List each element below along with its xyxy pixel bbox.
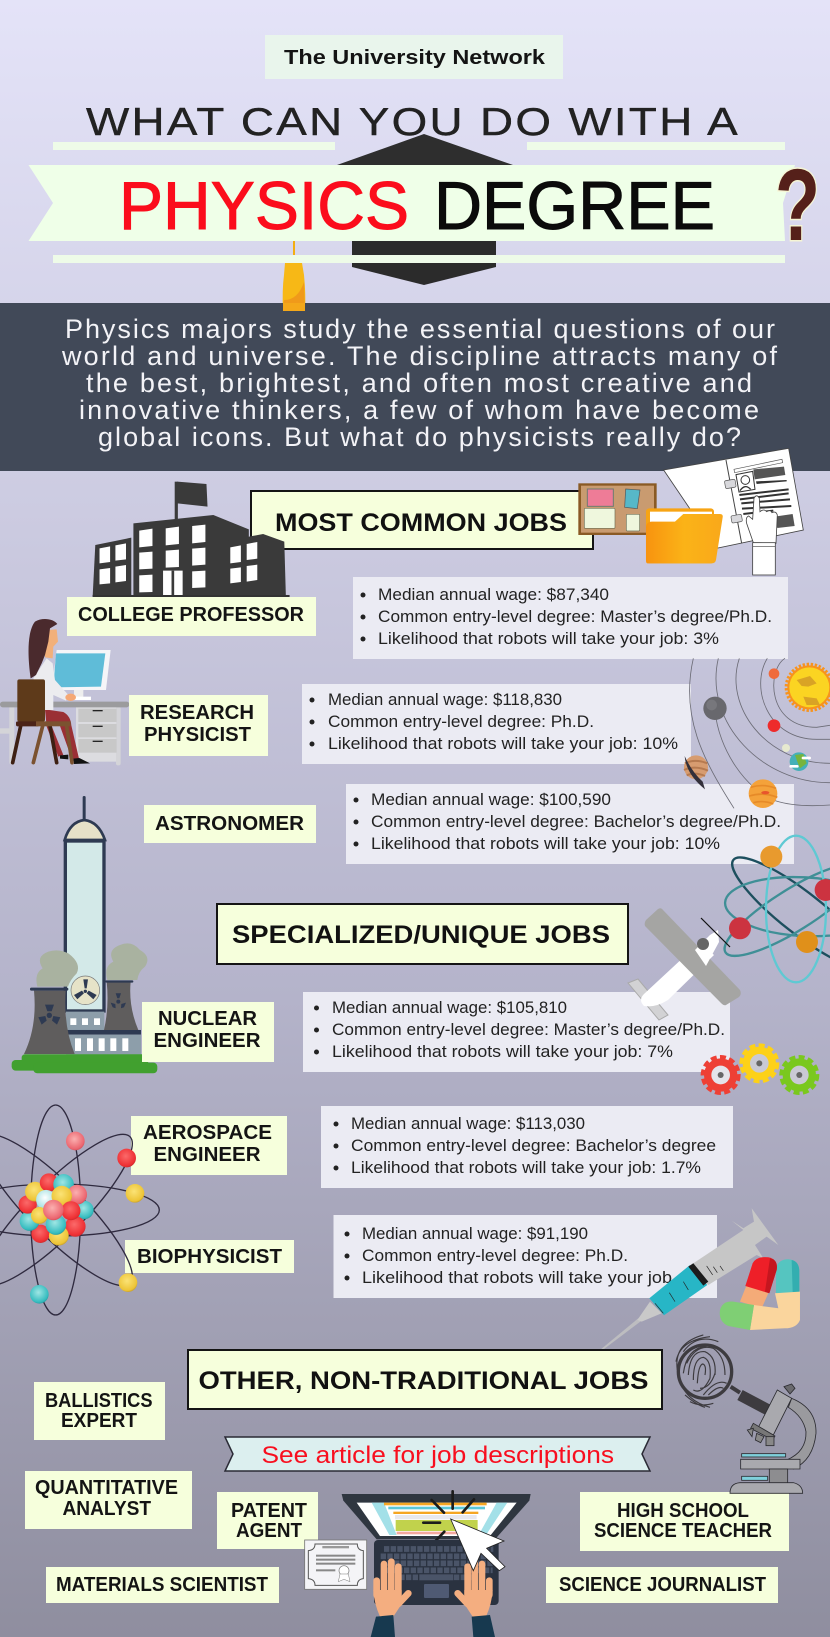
panel: research physicist facts: Likelihood that robots will take your job: 10%: [328, 734, 678, 753]
icon: fingerprint magnifier: [676, 1335, 768, 1410]
panel: nuclear engineer facts: Common entry-level degree: Master’s degree/Ph.D.: [332, 1020, 725, 1039]
title line one: WHAT CAN YOU DO WITH A: [86, 101, 740, 144]
panel: college professor facts: Common entry-level degree: Master’s degree/Ph.D.: [378, 607, 772, 626]
panel: biophysicist facts: Common entry-level degree: Ph.D.: [362, 1246, 628, 1265]
label: ballistics expert: BALLISTICS: [45, 1389, 152, 1412]
label: biophysicist: BIOPHYSICIST: [137, 1245, 282, 1268]
label: nuclear engineer: NUCLEAR: [158, 1007, 257, 1030]
pointing hand: [746, 496, 777, 575]
panel: astronomer facts: Likelihood that robots will take your job: 10%: [371, 834, 720, 853]
icon: laptop with hands: [342, 1491, 531, 1637]
icon: airplane: [628, 908, 741, 1020]
label: aerospace engineer: ENGINEER: [154, 1143, 261, 1166]
heading: specialized jobs: [217, 904, 628, 964]
icon: gears: [703, 1045, 817, 1093]
panel: astronomer facts: [346, 784, 794, 864]
ribbon: see article: [225, 1437, 650, 1471]
heading: other jobs: OTHER, NON-TRADITIONAL JOBS: [198, 1367, 648, 1395]
icon: certificate: [305, 1540, 367, 1589]
title ribbon: PHYSICS: [119, 168, 409, 244]
label: quantitative analyst: [25, 1471, 192, 1529]
panel: research physicist facts: [302, 684, 691, 764]
label: high school science teacher: [580, 1492, 789, 1551]
earth: [789, 752, 811, 771]
icon: solar system: [684, 658, 830, 808]
label: high school science teacher: SCIENCE TEACHER: [594, 1519, 772, 1542]
label: aerospace engineer: AEROSPACE: [143, 1121, 272, 1144]
label: research physicist: [129, 695, 268, 756]
folder: [646, 508, 723, 563]
document: [664, 448, 803, 548]
heading: specialized jobs: SPECIALIZED/UNIQUE JOBS: [232, 921, 610, 949]
sun: [787, 665, 830, 710]
laptop keyboard: [374, 1540, 499, 1605]
intro panel: [0, 303, 830, 471]
heading: other jobs: [188, 1350, 662, 1409]
heading: most common jobs: MOST COMMON JOBS: [275, 509, 567, 537]
label: astronomer: [144, 805, 316, 843]
icon: bulletin board, folder and document: [578, 448, 803, 575]
left cooling tower: [24, 950, 78, 1054]
label: quantitative analyst: QUANTITATIVE: [35, 1476, 178, 1499]
panel: research physicist facts: Median annual wage: $118,830: [328, 690, 562, 709]
hands: [371, 1562, 495, 1637]
panel: nuclear engineer facts: Likelihood that robots will take your job: 7%: [332, 1042, 673, 1061]
panel: research physicist facts: Common entry-level degree: Ph.D.: [328, 712, 594, 731]
panel: aerospace engineer facts: Common entry-level degree: Bachelor’s degree: [351, 1136, 716, 1155]
label: quantitative analyst: ANALYST: [62, 1497, 151, 1520]
right cooling tower: [104, 943, 147, 1030]
label: research physicist: RESEARCH: [140, 701, 254, 724]
label: science journalist: [546, 1567, 778, 1603]
panel: nuclear engineer facts: Median annual wage: $105,810: [332, 998, 567, 1017]
panel: college professor facts: [353, 577, 788, 659]
label: materials scientist: MATERIALS SCIENTIST: [56, 1573, 268, 1596]
intro panel: Physics majors study the essential questions of our: [65, 314, 775, 344]
heading: most common jobs: [251, 491, 593, 549]
intro panel: innovative thinkers, a few of whom have become: [79, 395, 759, 425]
label: astronomer: ASTRONOMER: [155, 812, 304, 835]
label: college professor: [67, 597, 316, 636]
title ribbon: [28, 142, 795, 263]
label: ballistics expert: EXPERT: [61, 1409, 137, 1432]
panel: nuclear engineer facts: [303, 992, 730, 1072]
nucleus: [18, 1173, 94, 1246]
label: science journalist: SCIENCE JOURNALIST: [559, 1573, 766, 1596]
cork board: [578, 483, 657, 535]
panel: aerospace engineer facts: [321, 1106, 733, 1188]
publisher badge: [265, 35, 563, 79]
panel: astronomer facts: Median annual wage: $100,590: [371, 790, 611, 809]
label: patent agent: AGENT: [236, 1519, 302, 1542]
label: research physicist: PHYSICIST: [144, 723, 251, 746]
intro panel: the best, brightest, and often most creative and: [86, 368, 752, 398]
icon: pills: [720, 1257, 800, 1330]
title ribbon: DEGREE: [434, 168, 715, 244]
panel: astronomer facts: Common entry-level degree: Bachelor’s degree/Ph.D.: [371, 812, 781, 831]
panel: biophysicist facts: Likelihood that robots will take your job: [362, 1268, 672, 1287]
icon: university building: [93, 482, 290, 599]
label: biophysicist: [125, 1240, 294, 1273]
icon: woman at computer: [0, 619, 129, 765]
intro panel: global icons. But what do physicists really do?: [98, 422, 741, 452]
cursor: [451, 1519, 505, 1571]
label: patent agent: [217, 1492, 318, 1549]
graduation cap graphic: [283, 134, 513, 311]
panel: aerospace engineer facts: Likelihood that robots will take your job: 1.7%: [351, 1158, 701, 1177]
icon: large atom: [0, 1105, 159, 1315]
ground: [12, 1054, 157, 1073]
jupiter: [749, 779, 777, 808]
ribbon: see article: See article for job descriptions: [262, 1442, 614, 1469]
panel: aerospace engineer facts: Median annual wage: $113,030: [351, 1114, 585, 1133]
label: patent agent: PATENT: [231, 1499, 307, 1522]
label: ballistics expert: [34, 1382, 165, 1440]
label: nuclear engineer: ENGINEER: [154, 1029, 261, 1052]
label: high school science teacher: HIGH SCHOOL: [617, 1499, 749, 1522]
label: nuclear engineer: [142, 1002, 274, 1062]
reactor symbol: [71, 976, 100, 1005]
publisher badge: The University Network: [284, 47, 546, 69]
label: college professor: COLLEGE PROFESSOR: [78, 603, 304, 626]
label: aerospace engineer: [131, 1116, 287, 1175]
icon: microscope: [730, 1384, 816, 1493]
label: materials scientist: [46, 1567, 279, 1603]
icon: nuclear power plant: [12, 796, 157, 1073]
laptop screen: [342, 1494, 531, 1539]
panel: biophysicist facts: Median annual wage: $91,190: [362, 1224, 588, 1243]
saturn: [684, 755, 708, 789]
panel: college professor facts: Likelihood that robots will take your job: 3%: [378, 629, 719, 648]
icon: syringe: [600, 1208, 778, 1350]
panel: biophysicist facts: [334, 1215, 717, 1298]
icon: teal atom: [715, 836, 830, 983]
panel: college professor facts: Median annual wage: $87,340: [378, 585, 609, 604]
intro panel: world and universe. The discipline attracts many of: [61, 341, 777, 371]
